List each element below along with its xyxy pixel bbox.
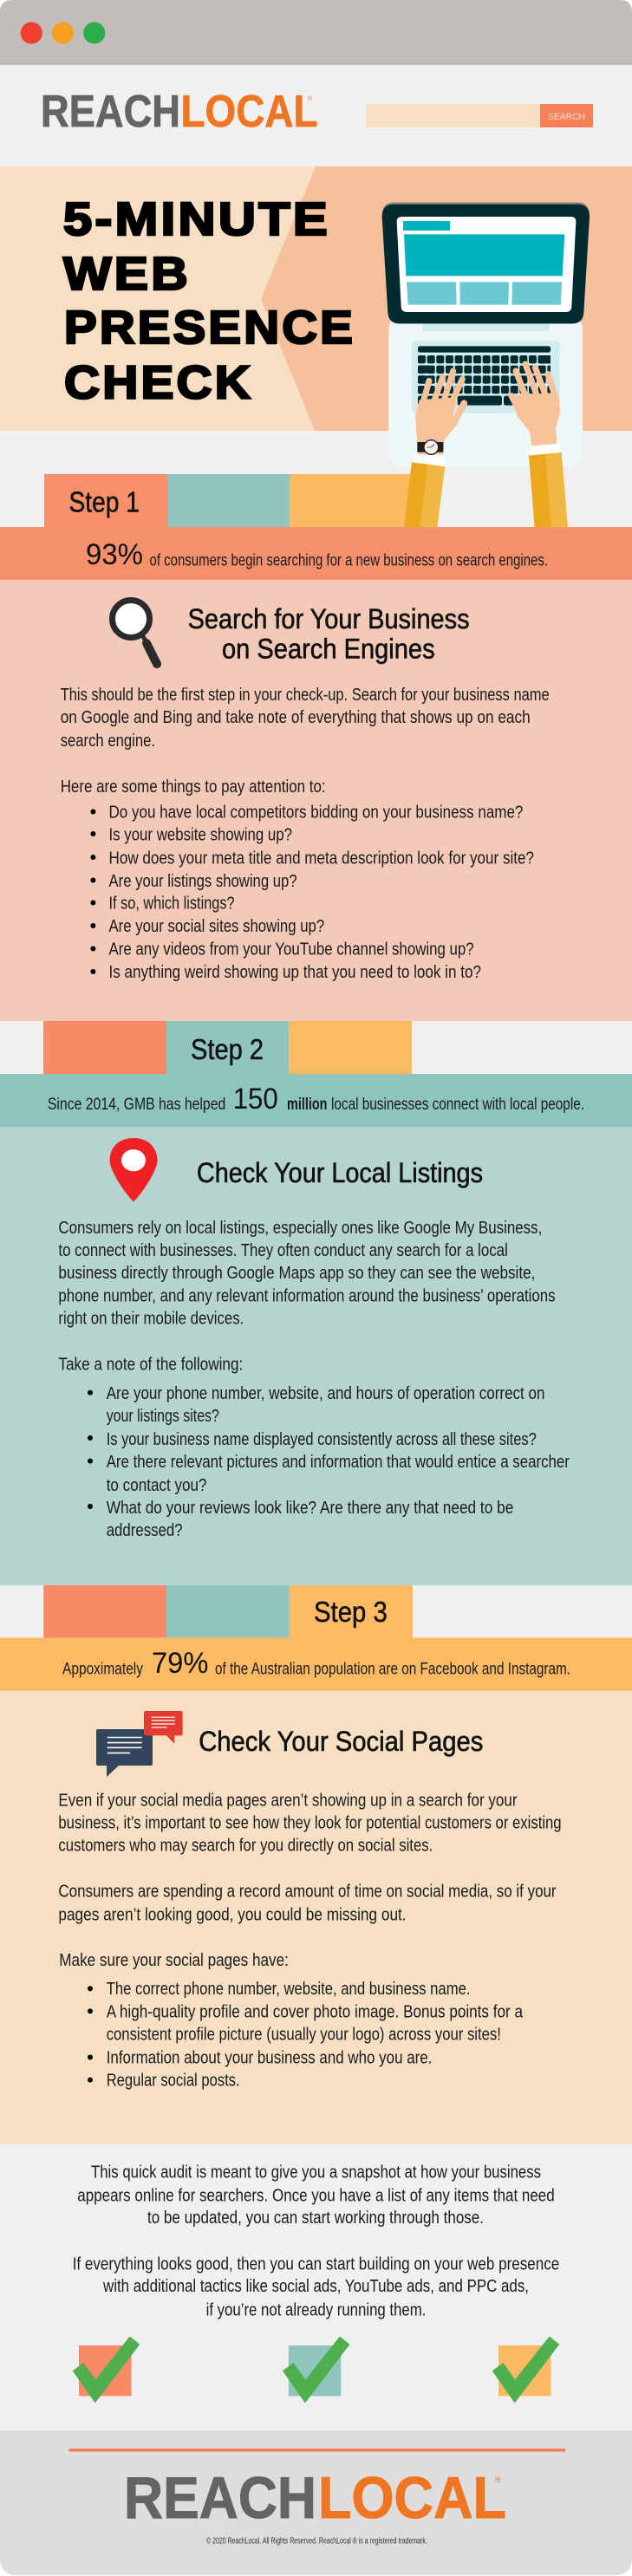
text block: step 3 intro: customers who may search for you directly on social sites. [58, 1836, 433, 1855]
heading: search for your business: on Search Engines [222, 634, 435, 665]
text block: step 3 intro [58, 1792, 562, 1970]
text block: step 1 intro: on Google and Bing and take note of everything that shows up on each [61, 708, 531, 727]
text block: step 2 intro: Consumers rely on local listings, especially ones like Google My Business, [58, 1219, 542, 1238]
list: step 2 checks: to contact you? [107, 1476, 206, 1495]
icon: magnifying glass [113, 600, 157, 664]
list: step 2 checks: What do your reviews look like? Are there any that need to be [107, 1499, 513, 1518]
icon: red window dot [21, 22, 42, 44]
right cuff [530, 444, 559, 455]
header logo: REACH [41, 87, 180, 137]
step 1 stat banner [0, 527, 632, 580]
list: step 3 checks: The correct phone number, website, and business name. [107, 1980, 470, 1999]
right sleeve [529, 452, 568, 527]
left hand [415, 371, 464, 454]
left sleeve [404, 462, 445, 527]
list: step 2 checks [88, 1384, 570, 1540]
footer logo: LOCAL [318, 2465, 506, 2531]
icon: teal checkbox [283, 2337, 350, 2403]
search bar: SEARCH [548, 112, 585, 122]
text block: step 3 intro: Make sure your social pages have: [59, 1951, 289, 1970]
wristwatch [417, 440, 443, 454]
step 3 stat banner: 79% [152, 1647, 208, 1680]
icon: amber checkbox [492, 2337, 559, 2403]
text block: step 1 intro [61, 686, 550, 797]
panel: step 1 search engines [0, 580, 632, 1021]
list: step 1 checks: Are your listings showing up? [109, 872, 297, 891]
text block: step 3 intro: Even if your social media pages aren’t showing up in a search for your [58, 1792, 518, 1811]
hero panel [0, 166, 632, 431]
text block: step 2 intro: Take a note of the following: [58, 1356, 243, 1375]
step 2 stat banner: million [287, 1096, 328, 1114]
step 3 stat banner: Appoximately [62, 1660, 143, 1678]
icon: amber window dot [52, 22, 74, 44]
step 3 stat banner [0, 1637, 632, 1691]
step 2 stat banner: Since 2014, GMB has helped [48, 1096, 225, 1114]
right hand [511, 364, 560, 446]
list: step 2 checks: addressed? [107, 1521, 183, 1540]
footer panel [0, 2430, 632, 2576]
search bar [366, 104, 593, 127]
icon: orange checkbox [73, 2337, 140, 2403]
icon: map pin [109, 1138, 158, 1201]
text block: step 2 intro: business directly through Google Maps app so they can see the website, [58, 1264, 535, 1283]
list: step 2 checks: Is your business name displayed consistently across all these sites? [107, 1430, 537, 1449]
header logo: ® [308, 95, 313, 102]
title: PRESENCE [64, 302, 355, 354]
step 1 tabs [44, 474, 413, 527]
footer logo: ® [495, 2475, 501, 2484]
list: step 1 checks: Are any videos from your YouTube channel showing up? [109, 940, 474, 959]
header logo [43, 94, 317, 127]
keyboard [412, 341, 560, 413]
step 3 tabs [43, 1585, 413, 1638]
text block: closing summary: appears online for searchers. Once you have a list of any items that need [77, 2186, 555, 2205]
title: 5-MINUTE [63, 193, 330, 245]
text block: step 3 intro: pages aren’t looking good, you could be missing out. [58, 1905, 407, 1924]
icon: green window dot [83, 22, 105, 44]
title: CHECK [64, 357, 253, 409]
list: step 3 checks: Regular social posts. [107, 2072, 240, 2091]
copyright: © 2020 ReachLocal. All Rights Reserved. ReachLocal ® is a registered trademark. [206, 2537, 427, 2547]
laptop base [388, 315, 583, 466]
list: step 1 checks: Do you have local competitors bidding on your business name? [109, 803, 523, 823]
text block: closing summary: If everything looks good, then you can start building on your web presence [73, 2255, 559, 2274]
laptop illustration [382, 202, 590, 527]
step 3 tabs: Step 3 [314, 1596, 388, 1628]
panel: step 2 local listings [0, 1127, 632, 1585]
list: step 2 checks: your listings sites? [107, 1407, 219, 1426]
text block: step 2 intro: phone number, and any relevant information around the business’ operations [58, 1287, 556, 1306]
step 2 stat banner [0, 1074, 632, 1127]
heading: search for your business [188, 603, 470, 665]
text block: step 2 intro: right on their mobile devices. [58, 1310, 244, 1329]
list: step 3 checks [88, 1980, 524, 2091]
list: step 3 checks: A high-quality profile and cover photo image. Bonus points for a [107, 2002, 524, 2021]
text block: closing summary: with additional tactics like social ads, YouTube ads, and PPC ads, [102, 2277, 529, 2296]
icon: chat bubbles [96, 1711, 183, 1777]
text block: closing summary [73, 2163, 559, 2319]
title [63, 193, 355, 409]
list: step 2 checks: Are your phone number, website, and hours of operation correct on [107, 1384, 544, 1403]
step 1 tabs: Step 1 [69, 486, 140, 518]
list: step 1 checks: Are your social sites showing up? [109, 917, 324, 936]
list: step 1 checks: Is anything weird showing up that you need to look in to? [109, 963, 481, 982]
browser bar [0, 0, 632, 65]
left cuff [414, 453, 445, 466]
text block: step 3 intro: Consumers are spending a record amount of time on social media, so if your [58, 1883, 557, 1902]
text block: closing summary: if you’re not already running them. [206, 2300, 426, 2319]
footer logo: REACH [124, 2465, 316, 2531]
step 2 stat banner: 150 [233, 1083, 278, 1116]
text block: closing summary: This quick audit is meant to give you a snapshot at how your business [91, 2163, 541, 2182]
list: step 3 checks: consistent profile picture (usually your logo) across your sites! [107, 2025, 501, 2044]
text block: step 2 intro [58, 1219, 556, 1375]
text block: closing summary: to be updated, you can start working through those. [147, 2208, 484, 2228]
laptop lid and screen [382, 202, 590, 323]
step 2 tabs [43, 1021, 412, 1074]
text block: step 2 intro: to connect with businesses. They often conduct any search for a local [58, 1241, 508, 1260]
header logo: LOCAL [180, 87, 317, 137]
list: step 3 checks: Information about your business and who you are. [107, 2048, 432, 2067]
heading: search for your business: Search for Your Business [188, 603, 470, 634]
text block: step 1 intro: search engine. [61, 732, 155, 751]
heading: check your social pages: Check Your Social Pages [199, 1726, 483, 1757]
title: WEB [63, 248, 191, 300]
text block: step 1 intro: Here are some things to pay attention to: [61, 777, 326, 797]
list: step 1 checks: How does your meta title and meta description look for your site? [109, 849, 534, 868]
panel: step 3 social pages [0, 1691, 632, 2144]
step 2 tabs: Step 2 [191, 1033, 264, 1065]
list: step 1 checks [90, 803, 534, 982]
heading: check your local listings: Check Your Local Listings [197, 1157, 483, 1188]
list: step 1 checks: If so, which listings? [109, 894, 235, 914]
list: step 1 checks: Is your website showing up? [109, 825, 292, 844]
step 1 stat banner: 93% [86, 538, 143, 571]
footer logo [124, 2465, 506, 2531]
